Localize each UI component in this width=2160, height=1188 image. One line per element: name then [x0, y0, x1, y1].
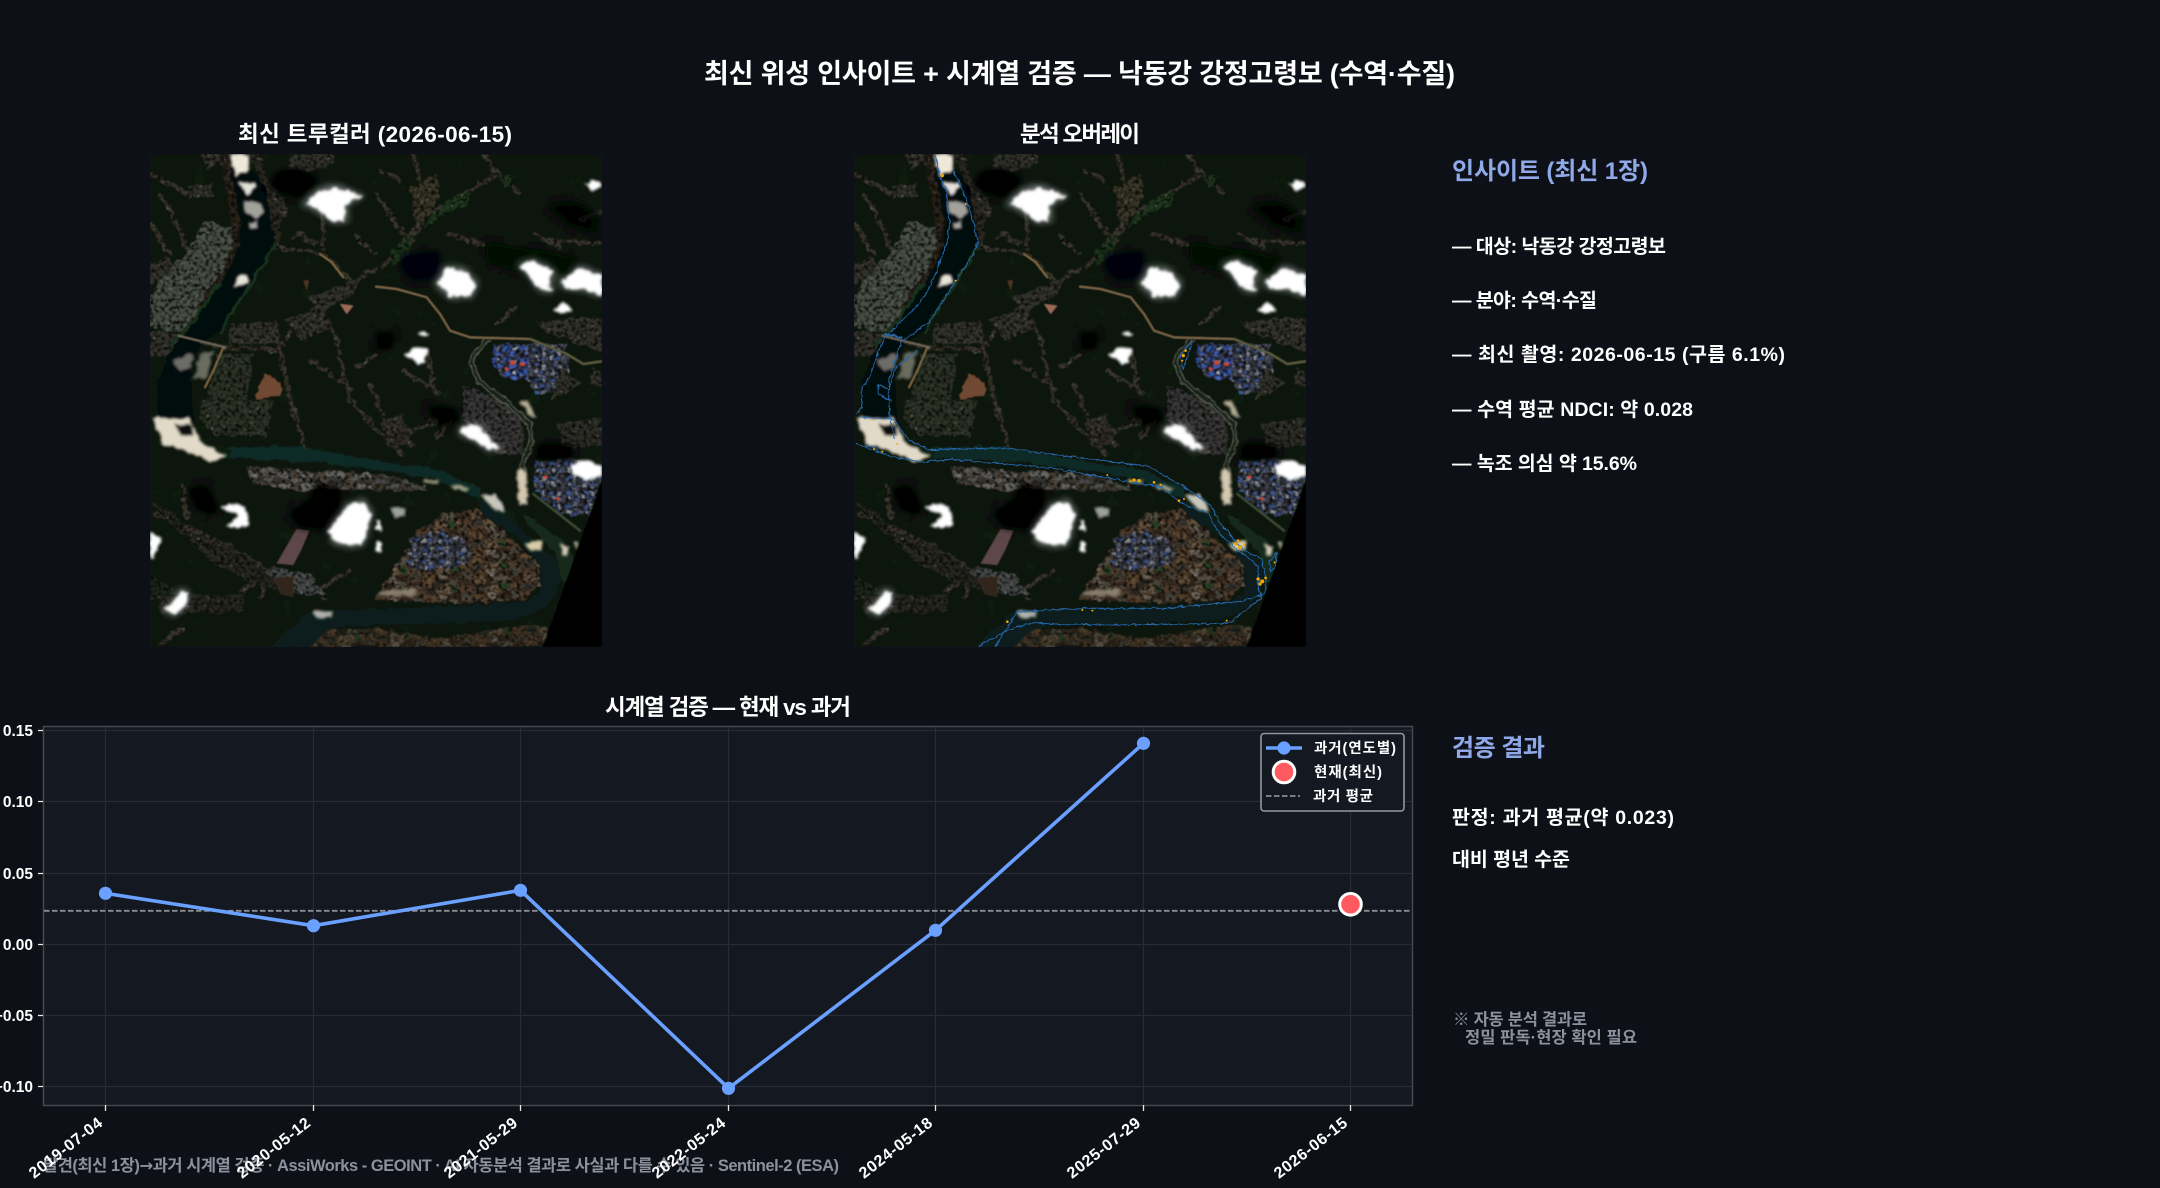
heading: true colour: 최신 트루컬러 (2026-06-15) [238, 122, 512, 147]
y axis labels: 0.00 [3, 937, 33, 954]
y axis labels: 0.05 [3, 866, 33, 883]
x axis labels: 2025-07-29 [1064, 1115, 1144, 1182]
panel: insights [1452, 158, 1785, 475]
x axis labels: 2022-05-24 [649, 1115, 729, 1182]
x axis labels: 2019-07-04 [26, 1115, 106, 1182]
x axis labels: 2024-05-18 [856, 1115, 936, 1182]
water outline [857, 154, 1277, 647]
axis ticks [38, 730, 1350, 1111]
mean line [44, 910, 1412, 912]
x axis labels: 2021-05-29 [441, 1115, 521, 1182]
disclaimer note: 정밀 판독·현장 확인 필요 [1465, 1028, 1637, 1047]
verdict line 1: 판정: 과거 평균(약 0.023) [1452, 807, 1674, 829]
overlay satellite image [854, 154, 1306, 647]
legend: 현재(최신) [1314, 764, 1382, 781]
legend: 과거(연도별) [1314, 740, 1396, 757]
verification heading: 검증 결과 [1452, 735, 1545, 762]
x axis labels: 2020-05-12 [234, 1115, 314, 1182]
panel: latest true colour image [150, 122, 602, 647]
series: past values [99, 737, 1150, 1095]
title: 최신 위성 인사이트 + 시계열 검증 — 낙동강 강정고령보 (수역·수질) [704, 59, 1455, 89]
insight: target: — 대상: 낙동강 강정고령보 [1452, 236, 1666, 258]
disclaimer note: ※ 자동 분석 결과로 [1453, 1010, 1587, 1029]
heading: analysis overlay: 분석 오버레이 [1020, 122, 1140, 147]
verdict line 2: 대비 평년 수준 [1452, 849, 1570, 871]
disclaimer note [1453, 1010, 1637, 1047]
y axis labels: 0.10 [3, 794, 33, 811]
insight: domain: — 분야: 수역·수질 [1452, 290, 1597, 312]
legend [1261, 734, 1404, 811]
x axis labels [26, 1115, 1351, 1182]
chart: time series validation [0, 695, 1412, 1182]
legend: 과거 평균 [1313, 788, 1373, 805]
y axis labels [0, 723, 33, 1096]
footer source line: 발견(최신 1장)→과거 시계열 검증 · AssiWorks - GEOINT · AI 자동분석 결과로 사실과 다를 수 있음 · Sentinel-2 (ESA) [43, 1156, 839, 1175]
suspected algae markers [873, 174, 1276, 623]
insights heading: 인사이트 (최신 1장) [1452, 158, 1648, 185]
plot area [44, 726, 1412, 1106]
panel: verification result [1452, 735, 1674, 1047]
x axis labels: 2026-06-15 [1271, 1115, 1351, 1182]
chart title: 시계열 검증 — 현재 vs 과거 [605, 695, 851, 720]
satellite image [150, 154, 602, 647]
insight: mean NDCI: — 수역 평균 NDCI: 약 0.028 [1452, 399, 1693, 421]
current value marker [1340, 894, 1361, 915]
y axis labels: 0.15 [3, 723, 33, 740]
insight: algae suspicion: — 녹조 의심 약 15.6% [1452, 453, 1637, 475]
insight: latest capture: — 최신 촬영: 2026-06-15 (구름 6.1%) [1452, 344, 1785, 366]
panel: analysis overlay image [854, 122, 1306, 647]
